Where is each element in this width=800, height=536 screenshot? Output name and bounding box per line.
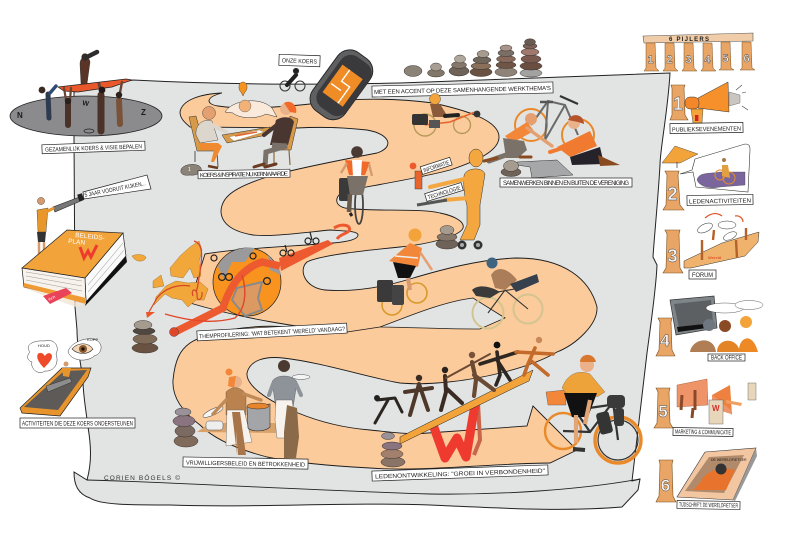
caption: tijdschrift (677, 500, 740, 510)
eye bubble: KOPP (87, 337, 98, 342)
book: beleidsplan: W.P. (47, 294, 57, 302)
pillar 4 with back office monitor (656, 296, 763, 356)
caption: ledenactiviteiten (687, 194, 753, 206)
plates (202, 405, 224, 419)
caption: ledenactiviteiten: LEDENACTIVITEITEN (689, 198, 751, 206)
caption: publieksevenementen (670, 122, 743, 134)
umbrella (662, 146, 698, 163)
red W (432, 403, 480, 458)
thought bubble (225, 101, 277, 118)
left chair (189, 116, 220, 151)
stone 1: 1 (188, 167, 191, 173)
pillar 6 with magazine: DE WERELDFIETSER (711, 458, 747, 462)
pillar 3 with forum platform: 3 (667, 246, 678, 266)
question mark (334, 225, 350, 239)
woman kneeling (550, 115, 620, 166)
caption: koers en inspiratie: KOERS & INSPIRATIE NU KERNWAARDE (200, 172, 288, 179)
pillars header: 6 pijlers: 1 (647, 54, 654, 66)
bike (515, 96, 594, 151)
kitchen scene (173, 360, 310, 458)
megaphone (698, 82, 729, 112)
person in blue (39, 86, 56, 118)
pillar 5 with marketing and communication: 5 (658, 402, 668, 421)
caption: samenwerken: SAMENWERKEN BINNEN EN BUITEN DE VERENIGING (503, 181, 629, 187)
caption: vrijwilligersbeleid (183, 457, 308, 469)
lookout with telescope (80, 52, 97, 84)
thought clouds (706, 303, 744, 313)
seesaw with red W and linked people (374, 337, 553, 467)
activities table with heart and eye thought bubbles (20, 337, 101, 416)
pillar 2 with umbrella and event card (662, 144, 750, 210)
person four (116, 82, 122, 124)
entablature (643, 33, 753, 43)
caption: gezamenlijk koers (42, 141, 145, 154)
caption: tijdschrift: TIJDSCHRIFT: DE WERELDFIETSER (679, 502, 738, 510)
lightbulb (239, 82, 247, 96)
cyclist with blue helmet (472, 258, 542, 328)
recumbent cyclist (412, 94, 480, 136)
book: beleidsplan (22, 230, 127, 307)
red arrow road around globe (165, 225, 350, 336)
Europe map (132, 241, 208, 318)
book: beleidsplan: BELEIDS- (75, 232, 105, 242)
back office people (690, 316, 758, 352)
caption: werkthema's (372, 82, 553, 97)
stone 6 (381, 432, 405, 467)
cyclist with white shirt (339, 146, 372, 224)
woman (254, 102, 296, 167)
pillars header: 6 pijlers: 2 (666, 54, 673, 66)
man (196, 106, 226, 168)
caption: technologie: TECHNOLOGIE (427, 186, 462, 201)
pillar 4 with back office monitor: 4 (660, 331, 670, 350)
caption: marketing: MARKETING & COMMUNICATIE (675, 430, 731, 436)
person three (99, 84, 105, 131)
stone stacks row (404, 39, 542, 77)
caption: marketing (673, 427, 733, 437)
magazine (677, 448, 756, 500)
cyclist orange vest (377, 228, 432, 315)
pillars header: 6 pijlers: 6 (743, 53, 750, 65)
pillar 6 with magazine: 6 (661, 476, 670, 495)
stack 3 (449, 55, 469, 76)
stone 3 (436, 226, 458, 249)
pillars header: 6 pijlers: 3 (685, 54, 692, 66)
caption: vrijwilligersbeleid: VRIJWILLIGERSBELEID EN BETROKKENHEID (186, 461, 306, 469)
caption: themprofilering: THEMPROFILERING: 'WAT BETEKENT 'WERELD' VANDAAG? (199, 327, 346, 340)
caption: 5 jaar vooruit kijken: 5 JAAR VOORUIT KIJKEN... (84, 181, 146, 199)
stone 4 (132, 320, 158, 353)
pillar 3 with forum platform: Wereld (708, 255, 722, 260)
stack 2 (428, 63, 444, 77)
serving man (269, 360, 310, 458)
caption: activiteiten (20, 418, 135, 428)
soup pot (247, 404, 270, 431)
caption: samenwerken (500, 178, 632, 187)
caption: forum: FORUM (692, 273, 713, 279)
pillar 3 with forum platform (663, 214, 759, 273)
caption: onze koers (279, 54, 320, 67)
red platform (58, 79, 132, 92)
signature: CORIEN BÖGELS © (104, 474, 180, 482)
pillar 2 with umbrella and event card: 2 (667, 184, 678, 204)
panel: grey scroll background (74, 73, 670, 509)
small cyclist silhouette (280, 68, 305, 91)
compass disk with team lifting a platform (10, 52, 162, 136)
person with telescope on the policy plan (36, 193, 84, 259)
compass disk with team lifting a platform: W (82, 100, 90, 108)
pillar columns (644, 42, 755, 71)
pillar 1 with megaphone: 1 (673, 94, 683, 114)
caption: ledenontwikkeling: LEDENONTWIKKELING: "GROEI IN VERBONDENHEID" (375, 469, 545, 481)
caption: back office: BACK OFFICE (711, 356, 742, 362)
caption: publieksevenementen: PUBLIEKSEVENEMENTEN (672, 126, 741, 134)
pillars header: 6 pijlers (643, 33, 755, 71)
platform (684, 232, 759, 268)
volunteer woman (213, 368, 261, 455)
caption: werkthema's: MET EEN ACCENT OP DEZE SAMENHANGENDE WERKTHEMA'S (374, 86, 551, 96)
toolbox (517, 160, 573, 178)
stone 5 (173, 408, 198, 447)
pillar 5 with marketing and communication (654, 379, 756, 428)
compass disk with team lifting a platform: Z (141, 108, 146, 117)
repair scene: bike with two people (484, 96, 620, 178)
caption: ledenontwikkeling (372, 465, 548, 481)
bookmark ribbon (43, 288, 72, 304)
stack 4 (470, 50, 492, 76)
plank (400, 370, 533, 444)
table scene: two people with map (181, 100, 298, 175)
pillar 1 with megaphone (670, 82, 748, 123)
person two (64, 88, 71, 125)
robot figure (410, 149, 485, 250)
stone 2 (501, 160, 521, 176)
man kneeling (484, 113, 552, 161)
table (222, 127, 270, 143)
small cyclists on arrow (211, 232, 319, 284)
stack 5 (495, 45, 517, 76)
monitor (670, 296, 717, 335)
big cyclist with panniers (545, 355, 641, 463)
pillars header: 6 pijlers: 5 (722, 53, 729, 65)
pillar 6 with magazine (656, 448, 757, 502)
stack 1 (404, 66, 422, 76)
caption: forum (689, 270, 716, 279)
pillars header: 6 pijlers: 6 PIJLERS (669, 37, 709, 43)
book: beleidsplan: PLAN (68, 238, 86, 247)
pillars header: 6 pijlers: 4 (704, 54, 711, 66)
caption: activiteiten: ACTIVITEITEN DIE DEZE KOERS ONDERSTEUNEN (22, 422, 133, 428)
compass disk with team lifting a platform: N (17, 111, 23, 120)
caption: back office (708, 354, 745, 362)
card (680, 144, 750, 192)
road: winding peach route (173, 93, 597, 469)
stack 6 (520, 39, 542, 77)
device screen (323, 65, 363, 107)
navigation device (304, 44, 379, 126)
people chain (374, 337, 553, 423)
globe (213, 248, 281, 316)
caption: onze koers: ONZE KOERS (282, 58, 317, 66)
caption: gezamenlijk koers: GEZAMENLIJK KOERS & VISIE BEPALEN (45, 144, 142, 154)
heart bubble: HOUD (38, 343, 50, 348)
caption: informatie: INFORMATIE (423, 160, 450, 174)
counter (197, 423, 278, 433)
right chair (272, 116, 298, 150)
pillar 5 with marketing and communication: W (712, 404, 720, 413)
